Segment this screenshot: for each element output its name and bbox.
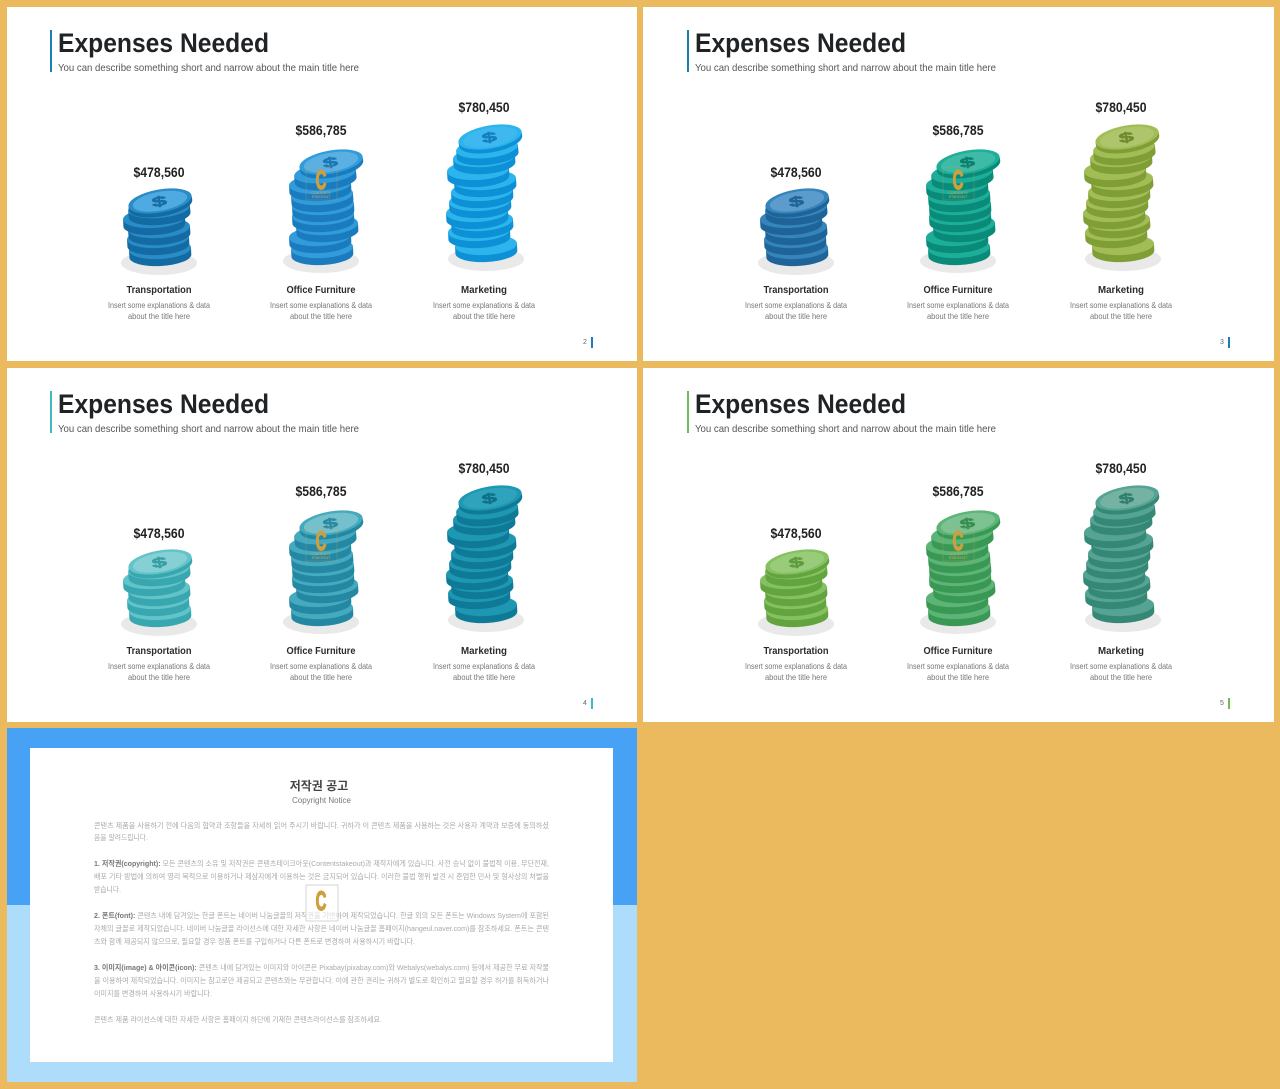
slide 2: mixed colour expenses panel: [643, 7, 1274, 361]
copyright body text: 이미지를 변경하여 사용하시기 바랍니다.: [94, 989, 212, 998]
value labels: $478,560: [770, 526, 822, 541]
title accent bar: [50, 30, 52, 72]
page number: 3: [1220, 339, 1224, 346]
page number: 4: [583, 700, 587, 707]
watermark: STAKEOUT: [949, 195, 968, 199]
category labels and descriptions: Marketing: [461, 284, 507, 296]
page number: 5: [1220, 700, 1224, 707]
category labels and descriptions: Insert some explanations & data: [745, 301, 847, 310]
title accent bar: [50, 391, 52, 433]
category labels and descriptions: Transportation: [126, 645, 192, 657]
copyright body text: 2. 폰트(font): 콘텐츠 내에 담겨있는 한글 폰트는 네이버 나눔글꼴의 저작권을 기반하여 제작되었습니다. 한글 외의 모든 폰트는 Windows System에 포함된: [94, 911, 549, 920]
category labels and descriptions: Insert some explanations & data: [907, 662, 1009, 671]
category labels and descriptions: Insert some explanations & data: [745, 662, 847, 671]
subtitle: You can describe something short and narrow about the main title here: [695, 423, 996, 435]
stack 2: office furniture: $: [322, 515, 339, 532]
category labels and descriptions: Transportation: [126, 284, 192, 296]
stack 3: marketing: [1083, 481, 1161, 632]
value labels: $586,785: [296, 484, 347, 499]
value labels: [134, 461, 510, 541]
stack 1: transportation: [121, 545, 197, 636]
watermark: C: [316, 525, 327, 556]
category labels and descriptions: about the title here: [290, 312, 353, 321]
category labels and descriptions: [108, 284, 535, 321]
category labels and descriptions: Insert some explanations & data: [433, 301, 535, 310]
watermark: CONTENTS: [948, 191, 968, 195]
title: Expenses Needed: [695, 389, 906, 419]
copyright subheading: Copyright Notice: [292, 795, 351, 805]
category labels and descriptions: Marketing: [461, 645, 507, 657]
category labels and descriptions: about the title here: [927, 312, 990, 321]
category labels and descriptions: Office Furniture: [286, 284, 356, 296]
watermark: C: [953, 164, 964, 195]
copyright body text: 음을 알려드립니다.: [94, 833, 148, 842]
subtitle: You can describe something short and narrow about the main title here: [58, 62, 359, 74]
watermark: CONTENTS: [948, 552, 968, 556]
category labels and descriptions: about the title here: [1090, 673, 1153, 682]
copyright notice panel: [7, 728, 637, 1082]
category labels and descriptions: about the title here: [765, 673, 828, 682]
category labels and descriptions: [745, 284, 1172, 321]
copyright body text: 배포 기타 방법에 의하여 영리 목적으로 이용하거나 제삼자에게 이용하는 것은 금지되어 있습니다. 이러한 불법 행위 발견 시 준엄한 민사 및 형사상의 처벌을: [94, 872, 549, 881]
value labels: $586,785: [932, 123, 984, 138]
slide 3: teal expenses panel: [7, 368, 637, 722]
category labels and descriptions: Insert some explanations & data: [1070, 662, 1172, 671]
stack 2: office furniture: $: [959, 515, 976, 532]
subtitle: You can describe something short and narrow about the main title here: [695, 62, 996, 74]
category labels and descriptions: Insert some explanations & data: [108, 301, 210, 310]
value labels: $780,450: [1096, 461, 1146, 476]
value labels: [134, 100, 510, 180]
stack 3: marketing: $: [1118, 129, 1135, 146]
category labels and descriptions: Transportation: [764, 645, 828, 657]
copyright body text: 받습니다.: [94, 885, 121, 894]
category labels and descriptions: about the title here: [927, 673, 990, 682]
value labels: [770, 100, 1146, 180]
category labels and descriptions: Office Furniture: [924, 645, 993, 657]
stack 2: office furniture: [920, 145, 1002, 273]
title accent bar: [687, 30, 689, 72]
category labels and descriptions: Insert some explanations & data: [433, 662, 535, 671]
copyright body text: 을 이용하여 제작되었습니다. 이미지는 참고로만 제공되고 콘텐츠와는 무관합니다. 이에 관한 권리는 귀하가 별도로 확인하고 필요할 경우 허가를 취득하거나: [94, 976, 549, 985]
page number: [1220, 698, 1230, 709]
stack 1: transportation: $: [151, 554, 168, 571]
category labels and descriptions: about the title here: [128, 312, 191, 321]
stack 1: transportation: $: [788, 193, 805, 210]
stack 3: marketing: $: [481, 129, 498, 146]
page number: [583, 337, 593, 348]
stack 3: marketing: $: [1118, 490, 1135, 507]
value labels: $780,450: [1096, 100, 1146, 115]
watermark: CONTENTS: [311, 552, 331, 556]
category labels and descriptions: about the title here: [453, 312, 516, 321]
page number: 2: [583, 339, 587, 346]
value labels: [770, 461, 1146, 541]
category labels and descriptions: Office Furniture: [286, 645, 356, 657]
stack 3: marketing: $: [481, 490, 498, 507]
watermark: C: [316, 885, 327, 916]
stack 2: office furniture: $: [322, 154, 339, 171]
stack 2: office furniture: $: [959, 154, 976, 171]
title: Expenses Needed: [58, 28, 269, 58]
stack 1: transportation: $: [151, 193, 168, 210]
slide 4: green expenses panel: [643, 368, 1274, 722]
title: Expenses Needed: [58, 389, 269, 419]
category labels and descriptions: about the title here: [290, 673, 353, 682]
copyright body text: 자체의 글꼴로 제작되었습니다. 네이버 나눔글꼴 라이선스에 대한 자세한 사항은 네이버 나눔글꼴 홈페이지(hangeul.naver.com)를 참조하세요. 폰트는 콘텐: [94, 924, 549, 933]
copyright body text: 츠와 함께 제공되지 않으므로, 필요할 경우 정품 폰트를 구입하거나 다른 폰트로 변경하여 사용하시기 바랍니다.: [94, 937, 415, 946]
category labels and descriptions: Marketing: [1098, 284, 1144, 296]
category labels and descriptions: about the title here: [128, 673, 191, 682]
category labels and descriptions: Insert some explanations & data: [270, 662, 372, 671]
watermark: C: [953, 525, 964, 556]
watermark: [943, 525, 974, 561]
stack 1: transportation: [121, 184, 197, 275]
watermark: [306, 885, 338, 921]
title: Expenses Needed: [695, 28, 906, 58]
value labels: $478,560: [134, 165, 184, 180]
page number: [1220, 337, 1230, 348]
category labels and descriptions: about the title here: [453, 673, 516, 682]
copyright body text: 3. 이미지(image) & 아이콘(icon): 콘텐츠 내에 담겨있는 이미지와 아이콘은 Pixabay(pixabay.com)와 Webalys(webalys.com) 등에서 제공한 무료 저작물: [94, 963, 549, 972]
watermark: STAKEOUT: [949, 556, 968, 560]
stack 2: office furniture: [283, 145, 365, 273]
category labels and descriptions: Transportation: [764, 284, 828, 296]
value labels: $478,560: [134, 526, 184, 541]
stack 2: office furniture: [920, 506, 1002, 634]
category labels and descriptions: Insert some explanations & data: [1070, 301, 1172, 310]
stack 1: transportation: [758, 545, 834, 636]
copyright body text: [94, 821, 549, 1024]
value labels: $478,560: [770, 165, 822, 180]
watermark: STAKEOUT: [312, 195, 331, 199]
category labels and descriptions: Insert some explanations & data: [270, 301, 372, 310]
category labels and descriptions: Office Furniture: [924, 284, 993, 296]
value labels: $780,450: [458, 100, 510, 115]
watermark: [943, 164, 974, 200]
title accent bar: [687, 391, 689, 433]
subtitle: You can describe something short and narrow about the main title here: [58, 423, 359, 435]
copyright body text: 콘텐츠 제품을 사용하기 전에 다음의 협약과 조항들을 자세히 읽어 주시기 바랍니다. 귀하가 이 콘텐츠 제품을 사용하는 것은 사용자 계약과 보증에 동의하셨: [94, 821, 549, 830]
slide 1: blue expenses panel: [7, 7, 637, 361]
copyright heading: 저작권 공고: [290, 778, 348, 793]
category labels and descriptions: about the title here: [1090, 312, 1153, 321]
stack 2: office furniture: [283, 506, 365, 634]
value labels: $780,450: [458, 461, 510, 476]
category labels and descriptions: [108, 645, 535, 682]
copyright body text: 콘텐츠 제품 라이선스에 대한 자세한 사항은 홈페이지 하단에 기재한 콘텐츠라이선스를 참조하세요.: [94, 1015, 382, 1024]
watermark: [306, 525, 337, 561]
watermark: [306, 164, 337, 200]
value labels: $586,785: [932, 484, 984, 499]
watermark: C: [316, 164, 327, 195]
category labels and descriptions: Insert some explanations & data: [907, 301, 1009, 310]
category labels and descriptions: Marketing: [1098, 645, 1144, 657]
page number: [583, 698, 593, 709]
value labels: $586,785: [296, 123, 347, 138]
category labels and descriptions: Insert some explanations & data: [108, 662, 210, 671]
category labels and descriptions: [745, 645, 1172, 682]
stack 3: marketing: [446, 481, 524, 632]
stack 1: transportation: [758, 184, 834, 275]
copyright body text: 1. 저작권(copyright): 모든 콘텐츠의 소유 및 저작권은 콘텐츠테이크아웃(Contentstakeout)과 제작자에게 있습니다. 사전 승낙 없이 불법적 이용, 무단전재,: [94, 859, 549, 868]
watermark: STAKEOUT: [312, 556, 331, 560]
category labels and descriptions: about the title here: [765, 312, 828, 321]
stack 3: marketing: [446, 120, 524, 271]
stack 3: marketing: [1083, 120, 1161, 271]
watermark: CONTENTS: [311, 191, 331, 195]
stack 1: transportation: $: [788, 554, 805, 571]
